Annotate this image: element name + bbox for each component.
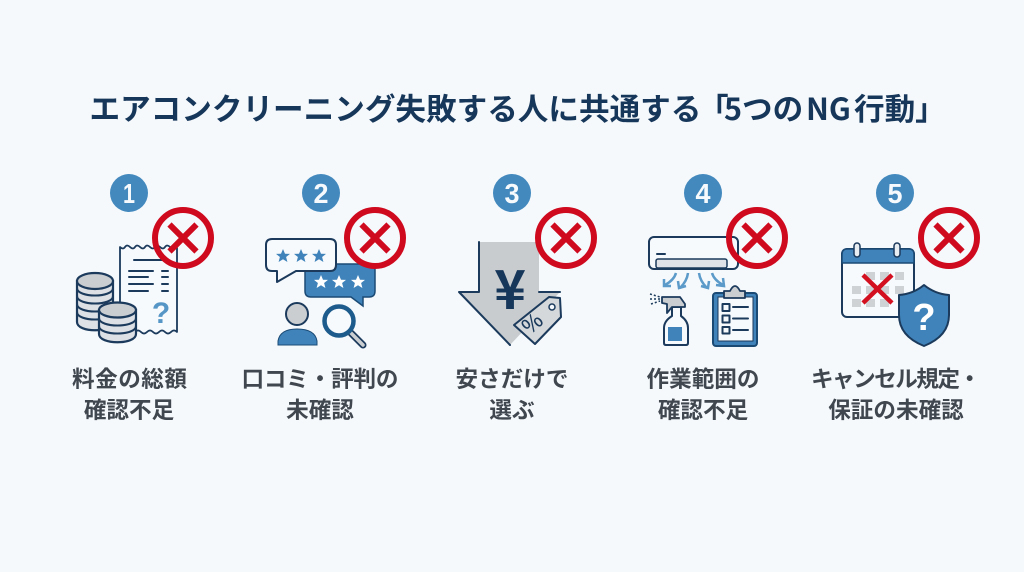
number badge 3 xyxy=(493,174,531,212)
label 3: 選ぶ xyxy=(489,392,535,425)
icon: red cross mark xyxy=(921,210,977,266)
icon: yen down arrow and discount tag xyxy=(459,242,561,345)
item 3: choosing only on price xyxy=(456,174,594,425)
icon: red cross mark xyxy=(347,210,403,266)
label 4: 作業範囲の xyxy=(647,361,759,394)
item 4: work scope not confirmed xyxy=(647,174,785,425)
icon: red cross mark xyxy=(538,210,594,266)
icon: red cross mark xyxy=(155,210,211,266)
number badge 4: 4 xyxy=(696,178,711,209)
title: 行動」 xyxy=(854,85,946,129)
icon: receipt and coins xyxy=(77,246,177,342)
label 5: 保証の未確認 xyxy=(828,392,964,425)
icon: calendar and warranty shield xyxy=(842,243,949,346)
number badge 1: 1 xyxy=(123,178,135,209)
icon: review bubbles, person and magnifier xyxy=(266,239,375,345)
title: NG xyxy=(806,85,851,129)
number badge 1 xyxy=(110,174,148,212)
icon: receipt and coins: ? xyxy=(152,297,170,330)
label 5: キャンセル規定・ xyxy=(811,361,981,394)
title: エアコンクリーニング失敗する人に共通する xyxy=(90,85,701,129)
icon: calendar and warranty shield: ? xyxy=(912,297,936,339)
number badge 2 xyxy=(302,174,340,212)
icon: yen down arrow and discount tag: % xyxy=(515,305,549,341)
number badge 4 xyxy=(684,174,722,212)
title: 5つの xyxy=(724,85,803,129)
label 4: 確認不足 xyxy=(658,392,748,425)
number badge 3: 3 xyxy=(504,178,520,209)
icon: air conditioner, spray and clipboard xyxy=(649,237,757,346)
number badge 5: 5 xyxy=(888,178,902,209)
item 1: total fee not confirmed xyxy=(72,174,211,425)
icon: yen down arrow and discount tag: ¥ xyxy=(494,246,526,325)
item 5: cancellation and warranty not confirmed xyxy=(811,174,981,425)
number badge 5 xyxy=(876,174,914,212)
label 1: 料金の総額 xyxy=(72,361,187,394)
label 2: 未確認 xyxy=(286,392,354,425)
label 2: 口コミ・評判の xyxy=(242,361,398,394)
label 3: 安さだけで xyxy=(456,361,568,394)
item 2: reviews not confirmed xyxy=(242,174,403,425)
label 1: 確認不足 xyxy=(84,392,174,425)
icon: red cross mark xyxy=(729,210,785,266)
title: 「 xyxy=(698,85,729,129)
number badge 2: 2 xyxy=(314,178,328,209)
